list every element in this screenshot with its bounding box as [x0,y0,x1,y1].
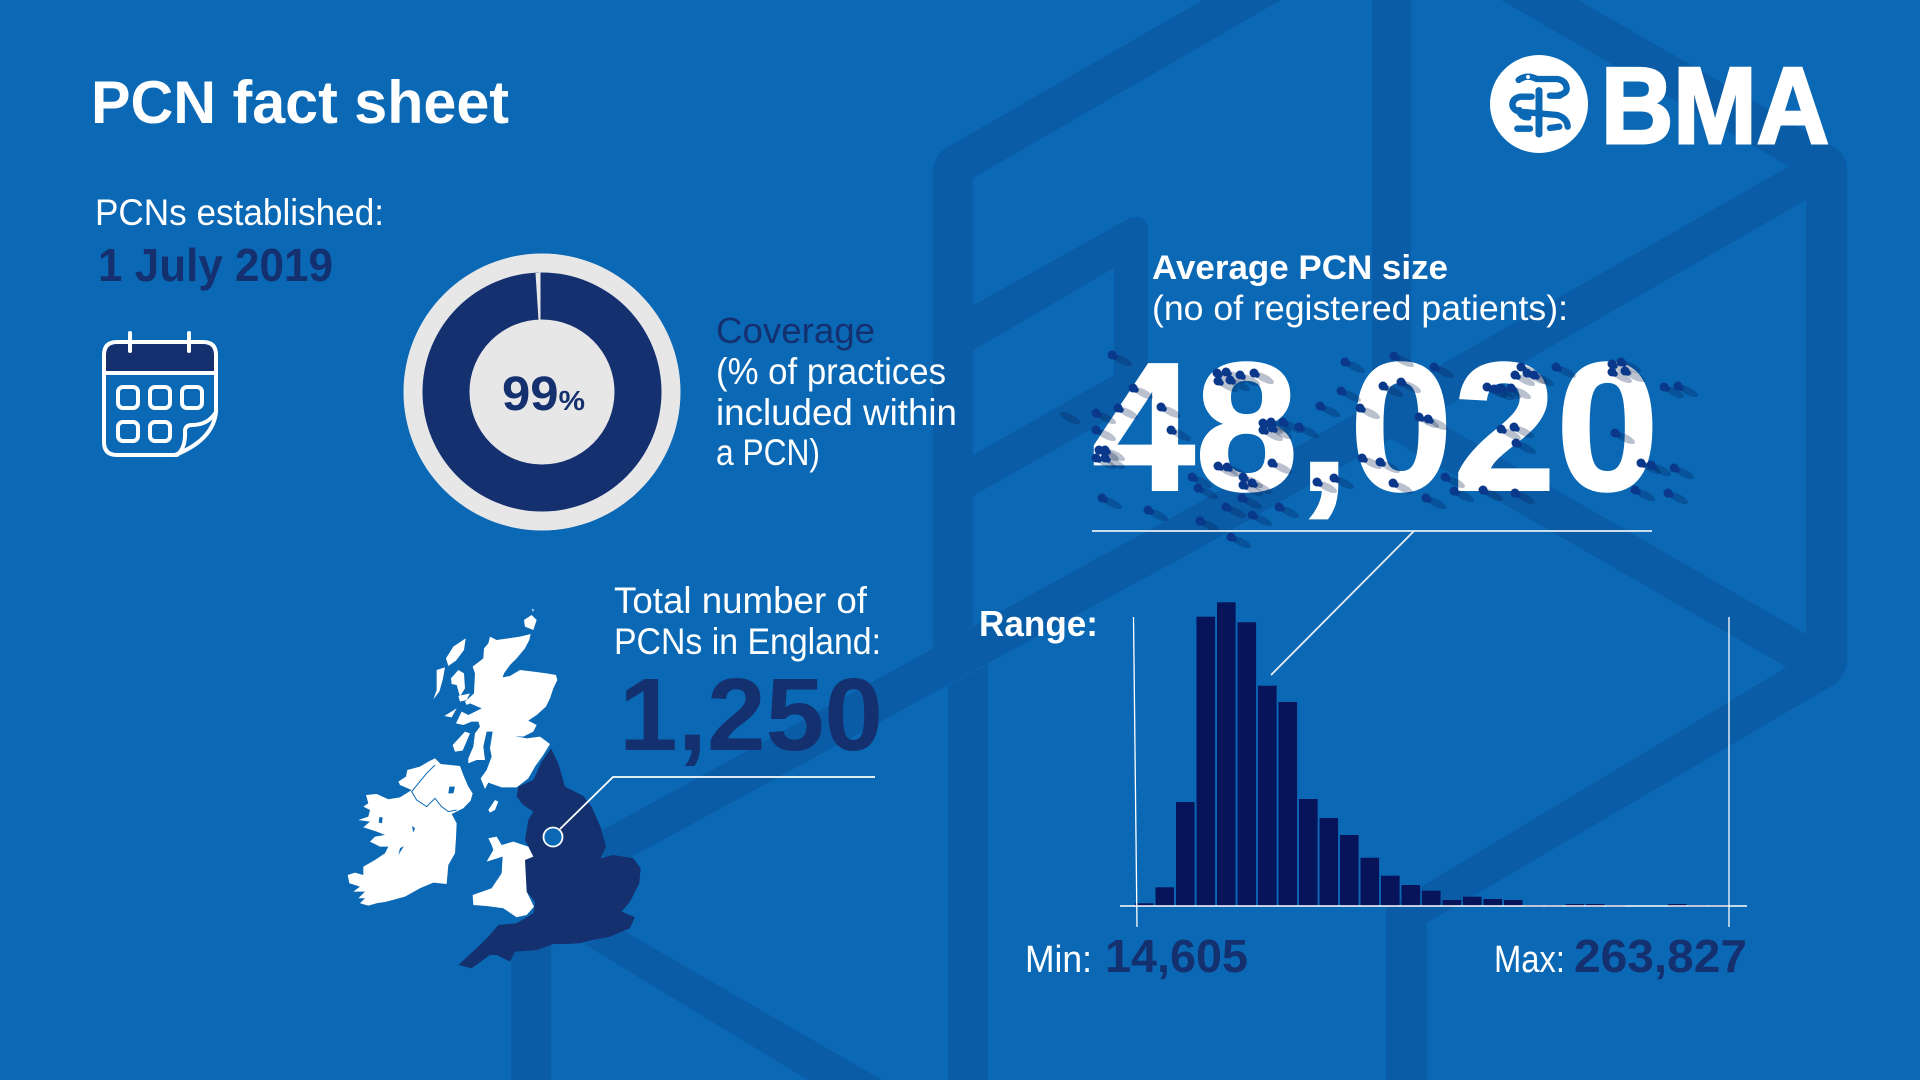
minimum value: 14,605 [1105,930,1248,982]
Scotland and islands [433,608,557,813]
average PCN size label: Average PCN size [1152,249,1448,287]
established date: 1 July 2019 [98,239,333,291]
coverage description: (% of practices [716,351,946,392]
Wales [473,837,534,917]
minimum value: Min: [1025,939,1092,981]
leader line from average to histogram [1092,531,1652,675]
crowd of people with shadows [1058,350,1700,550]
histogram bars [1135,602,1728,907]
BMA logo [1490,45,1829,167]
coverage description: Coverage [716,310,875,351]
PCNs established label: PCNs established: [95,192,384,233]
total PCNs label [614,580,881,662]
total PCNs label: PCNs in England: [614,621,881,662]
maximum value [1494,930,1747,982]
range label: Range: [979,603,1098,644]
England [458,748,641,968]
total PCNs value: 1,250 [619,657,883,772]
icon: calendar [104,333,216,455]
donut chart: 99% coverage [404,254,680,530]
maximum value: 263,827 [1574,930,1747,982]
donut value: 99% [502,368,585,421]
map: British Isles with England highlighted [348,608,641,968]
Ireland [348,758,473,906]
background hexagon pattern [511,0,1847,1080]
coverage description [716,310,957,473]
coverage description: included within [716,392,957,433]
average PCN size label: (no of registered patients): [1152,289,1568,328]
maximum value: Max: [1494,939,1565,981]
logo emblem: serpent and staff [1490,55,1588,153]
logo wordmark: BMA [1601,45,1829,167]
minimum value [1025,930,1248,982]
histogram axes and range markers [1120,617,1747,927]
total PCNs label: Total number of [614,580,868,621]
average PCN size label [1152,249,1568,328]
title: PCN fact sheet [91,69,509,136]
average PCN size value: 48,020 [1092,324,1659,529]
map callout marker and leader line [544,777,875,846]
histogram of PCN sizes [1120,602,1747,927]
coverage description: a PCN) [716,432,820,473]
